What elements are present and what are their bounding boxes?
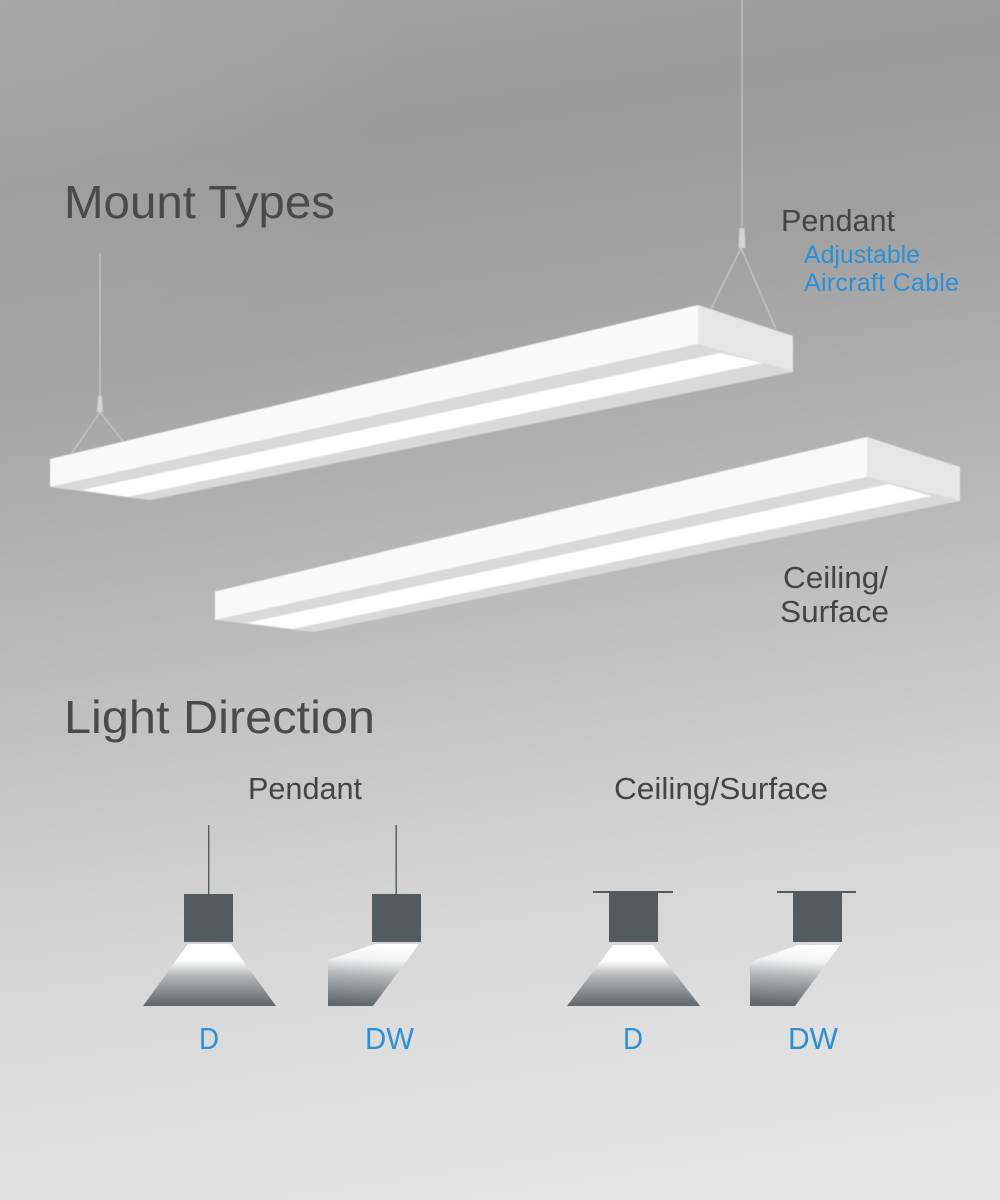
pendant column heading: Pendant — [248, 772, 363, 806]
fixture light panel — [247, 484, 931, 629]
label: pendant D: D — [199, 1021, 219, 1056]
fixture light panel — [82, 353, 763, 497]
pendant cable, left — [72, 253, 123, 453]
diagram: surface DW — [750, 891, 856, 1006]
fixture body front — [50, 305, 698, 487]
ceiling surface label: Surface — [780, 594, 889, 629]
ceiling surface label: Ceiling/ — [783, 560, 888, 595]
adjustable cable note: Aircraft Cable — [804, 269, 959, 297]
pendant cable, right — [711, 0, 775, 327]
pendant label: Pendant — [781, 204, 896, 238]
label: surface D: D — [623, 1021, 643, 1056]
fixture end face — [698, 305, 793, 372]
label: pendant DW: DW — [365, 1021, 415, 1056]
adjustable cable note — [804, 241, 959, 297]
adjustable cable note: Adjustable — [804, 241, 920, 269]
ceiling surface label — [780, 560, 889, 629]
pendant fixture — [50, 0, 793, 500]
fixture end face — [867, 437, 960, 501]
ceiling surface fixture — [215, 437, 960, 632]
diagram: surface D — [567, 891, 700, 1006]
fixture underside — [215, 477, 960, 632]
ceiling surface column heading: Ceiling/Surface — [614, 771, 828, 806]
diagram: pendant DW — [328, 825, 421, 1006]
title: Light Direction: Light Direction — [64, 691, 375, 743]
title: Mount Types: Mount Types — [64, 176, 335, 228]
fixture underside — [50, 344, 793, 500]
fixture body front — [215, 437, 867, 620]
diagram: pendant D — [143, 825, 276, 1006]
label: surface DW: DW — [788, 1021, 839, 1056]
